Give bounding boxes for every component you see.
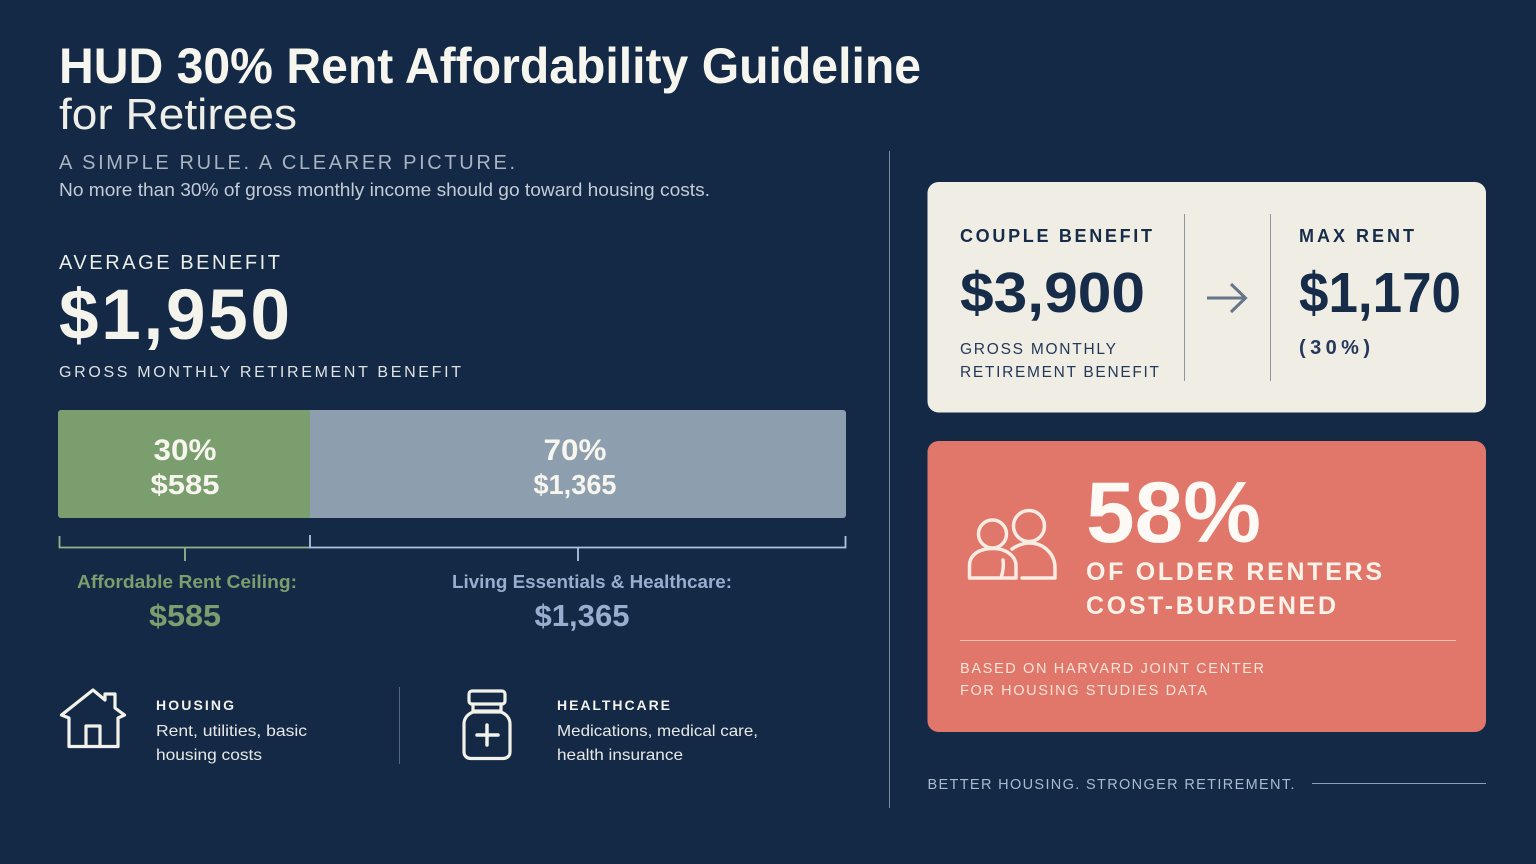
label: living essentials and healthcare: Living Essentials & Healthcare:	[452, 572, 732, 592]
couple benefit column: RETIREMENT BENEFIT	[960, 364, 1160, 381]
subtitle	[59, 152, 710, 200]
stat description: OF OLDER RENTERS	[1086, 558, 1382, 586]
title: HUD 30% Rent Affordability Guideline	[59, 38, 921, 94]
arrow	[1207, 284, 1246, 312]
bar segment: 30%: 30%	[154, 434, 216, 467]
healthcare text: HEALTHCARE	[557, 697, 670, 713]
icon: people	[970, 510, 1055, 578]
couple benefit column: $3,900	[960, 261, 1145, 325]
stat description: COST-BURDENED	[1086, 592, 1336, 620]
bar segment: 30%: $585	[150, 469, 220, 500]
source note: FOR HOUSING STUDIES DATA	[960, 683, 1207, 699]
label: affordable rent ceiling	[77, 572, 297, 633]
panel: couple benefit	[928, 182, 1486, 412]
housing text: housing costs	[156, 747, 262, 764]
bar segment: 30%	[58, 410, 310, 518]
stat description	[1086, 558, 1382, 620]
big stat: 58%	[1086, 465, 1261, 561]
healthcare text	[557, 697, 758, 764]
max rent column: MAX RENT	[1299, 226, 1414, 246]
average benefit	[59, 252, 461, 381]
healthcare text: health insurance	[557, 747, 683, 764]
housing text: HOUSING	[156, 697, 234, 713]
label: affordable rent ceiling: $585	[149, 598, 221, 633]
icon: house	[62, 690, 124, 746]
title: for Retirees	[59, 90, 297, 139]
average benefit: $1,950	[59, 276, 290, 355]
bar segment: 70%: $1,365	[534, 469, 616, 500]
label: living essentials and healthcare: $1,365	[534, 598, 630, 633]
couple benefit column	[960, 226, 1160, 381]
tagline: BETTER HOUSING. STRONGER RETIREMENT.	[928, 777, 1294, 793]
max rent column: $1,170	[1299, 261, 1461, 325]
housing text	[156, 697, 307, 764]
bracket: affordable rent	[60, 536, 310, 561]
panel: 58% cost-burdened	[928, 441, 1486, 732]
source note: BASED ON HARVARD JOINT CENTER	[960, 661, 1264, 677]
label: affordable rent ceiling: Affordable Rent Ceiling:	[77, 572, 297, 592]
healthcare text: Medications, medical care,	[557, 723, 758, 740]
average benefit: AVERAGE BENEFIT	[59, 252, 280, 274]
bar segment: 70%: 70%	[544, 434, 606, 467]
source note	[960, 661, 1264, 699]
housing text: Rent, utilities, basic	[156, 723, 307, 740]
couple benefit column: GROSS MONTHLY	[960, 341, 1116, 358]
couple benefit column: COUPLE BENEFIT	[960, 226, 1152, 246]
title	[59, 38, 921, 139]
icon: medicine bottle	[464, 691, 510, 758]
bar segment: 70%	[310, 410, 846, 518]
label: living essentials and healthcare	[452, 572, 732, 633]
average benefit: GROSS MONTHLY RETIREMENT BENEFIT	[59, 364, 461, 381]
subtitle: No more than 30% of gross monthly income should go toward housing costs.	[59, 180, 710, 200]
max rent column	[1299, 226, 1461, 359]
subtitle: A SIMPLE RULE. A CLEARER PICTURE.	[59, 152, 515, 174]
bracket: living essentials	[310, 535, 846, 561]
stacked bar chart	[58, 410, 846, 518]
max rent column: (30%)	[1299, 337, 1370, 359]
